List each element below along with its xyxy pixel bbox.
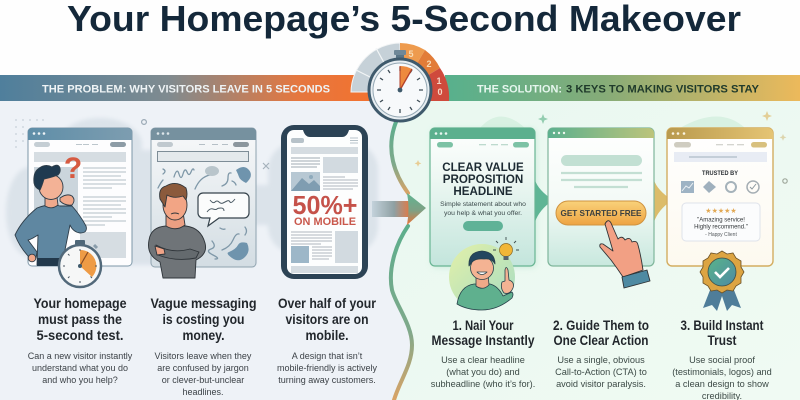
icon: small stopwatch xyxy=(59,240,101,287)
text: mobile visitors: visitors are on xyxy=(286,312,368,327)
text: key 1: subheadline (who it’s for). xyxy=(431,379,535,389)
text: mobile visitors: turning away customers. xyxy=(278,375,376,385)
text: mobile visitors: Over half of your xyxy=(278,296,377,311)
text: homepage test: understand what you do xyxy=(32,363,128,373)
text: key 1: 1. Nail Your xyxy=(452,318,514,333)
gauge and stopwatch xyxy=(351,43,449,121)
text: vague messaging: are confused by jargon xyxy=(157,363,249,373)
text: key 2: One Clear Action xyxy=(554,333,648,348)
jargon squiggles xyxy=(158,166,251,260)
text: homepage test: and who you help? xyxy=(42,375,118,385)
browser window 1 xyxy=(28,128,132,266)
panel: clear message illustration xyxy=(430,128,553,310)
icon: pointing hand xyxy=(600,221,650,288)
cta button xyxy=(556,201,646,225)
logo row xyxy=(681,181,759,193)
text: key 3 xyxy=(672,318,772,400)
text: mobile visitors: mobile-friendly is actively xyxy=(277,363,378,373)
text: vague messaging: Visitors leave when they xyxy=(155,351,252,361)
connector chevron 2 xyxy=(654,180,672,222)
text: key 2: avoid visitor paralysis. xyxy=(556,379,646,389)
browser window 3 xyxy=(430,128,535,266)
icon: ribbon badge xyxy=(700,251,744,311)
headline text: CLEAR VALUE xyxy=(442,161,524,174)
text: homepage test xyxy=(28,296,133,385)
trusted by label: TRUSTED BY xyxy=(702,170,739,177)
testimonial card: - Happy Client xyxy=(705,232,737,238)
stat label: ON MOBILE xyxy=(294,216,356,228)
text: homepage test: must pass the xyxy=(38,312,122,327)
testimonial card: ★★★★★ xyxy=(705,207,737,215)
band: the solution xyxy=(445,75,800,101)
text: key 3: a clean design to show xyxy=(675,379,769,389)
gauge dial: 2 xyxy=(426,59,432,69)
person arms crossed xyxy=(148,183,206,278)
headline text xyxy=(442,161,524,198)
gauge dial: 5 xyxy=(408,49,414,59)
browser window 4 xyxy=(548,128,654,266)
person thinking xyxy=(15,165,86,266)
text: key 2: Call-to-Action (CTA) to xyxy=(555,367,647,377)
icon: light bulb xyxy=(493,237,519,260)
band: the problem: THE PROBLEM: WHY VISITORS LEAVE IN 5 SECONDS xyxy=(42,84,330,96)
text: key 3: Use social proof xyxy=(689,355,755,365)
panel: 5-second test illustration xyxy=(15,128,132,287)
decorative sparkles xyxy=(15,111,787,183)
text: mobile visitors: mobile. xyxy=(306,328,348,343)
text: homepage test: 5-second test. xyxy=(36,328,124,343)
panel: mobile phone xyxy=(281,125,368,279)
panel: one clear action illustration xyxy=(548,128,672,288)
text: mobile visitors: A design that isn’t xyxy=(292,351,363,361)
testimonial card: "Amazing service! xyxy=(697,218,745,224)
stat: 50%+: 50%+ xyxy=(292,192,358,220)
text: key 1: Message Instantly xyxy=(432,333,535,348)
person with idea xyxy=(449,237,519,310)
band: the problem xyxy=(0,75,372,101)
text: vague messaging xyxy=(150,296,256,397)
text: homepage test: Can a new visitor instantly xyxy=(28,351,133,361)
subheadline text: Simple statement about who xyxy=(440,201,526,208)
icon: question mark: ? xyxy=(64,152,82,185)
text: vague messaging: is costing you xyxy=(162,312,244,327)
subheadline text: you help & what you offer. xyxy=(444,210,522,217)
text: key 1: Use a clear headline xyxy=(441,355,525,365)
panel: vague messaging illustration xyxy=(148,128,256,278)
cta placeholder xyxy=(463,221,503,231)
text: key 1: (what you do) and xyxy=(446,367,520,377)
text: mobile visitors xyxy=(277,296,378,385)
headline text: PROPOSITION xyxy=(443,173,523,186)
text: vague messaging: or clever-but-unclear xyxy=(162,375,244,385)
gauge dial: 1 xyxy=(436,76,442,86)
text: key 2: Use a single, obvious xyxy=(557,355,645,365)
text: key 3: Trust xyxy=(708,333,737,348)
text: key 2 xyxy=(553,318,649,389)
text: vague messaging: Vague messaging xyxy=(150,296,256,311)
text: key 2: 2. Guide Them to xyxy=(553,318,649,333)
text: key 3: 3. Build Instant xyxy=(680,318,764,333)
browser window 5 xyxy=(667,128,773,266)
divider wave xyxy=(391,122,412,400)
gauge dial xyxy=(351,43,449,101)
text: vague messaging: money. xyxy=(182,328,224,343)
subheadline text xyxy=(440,201,526,217)
speech bubble xyxy=(198,193,249,226)
text: vague messaging: headlines. xyxy=(182,387,224,397)
browser window 2 xyxy=(151,128,256,267)
gauge dial: 0 xyxy=(437,87,443,97)
panel: build trust illustration xyxy=(667,128,773,311)
text: homepage test: Your homepage xyxy=(34,296,126,311)
cta button: GET STARTED FREE xyxy=(560,209,642,218)
band: the solution: 3 KEYS TO MAKING VISITORS STAY xyxy=(566,84,759,96)
band: the solution: THE SOLUTION: xyxy=(477,84,562,96)
testimonial card xyxy=(682,203,760,241)
stopwatch xyxy=(369,50,431,121)
text: key 1 xyxy=(431,318,535,389)
headline text: HEADLINE xyxy=(453,185,513,198)
image placeholder xyxy=(291,172,320,191)
testimonial card: Highly recommend." xyxy=(694,224,748,230)
arrow: problem to solution xyxy=(372,193,426,225)
text: key 3: (testimonials, logos) and xyxy=(672,367,772,377)
connector chevron 1 xyxy=(535,180,553,222)
